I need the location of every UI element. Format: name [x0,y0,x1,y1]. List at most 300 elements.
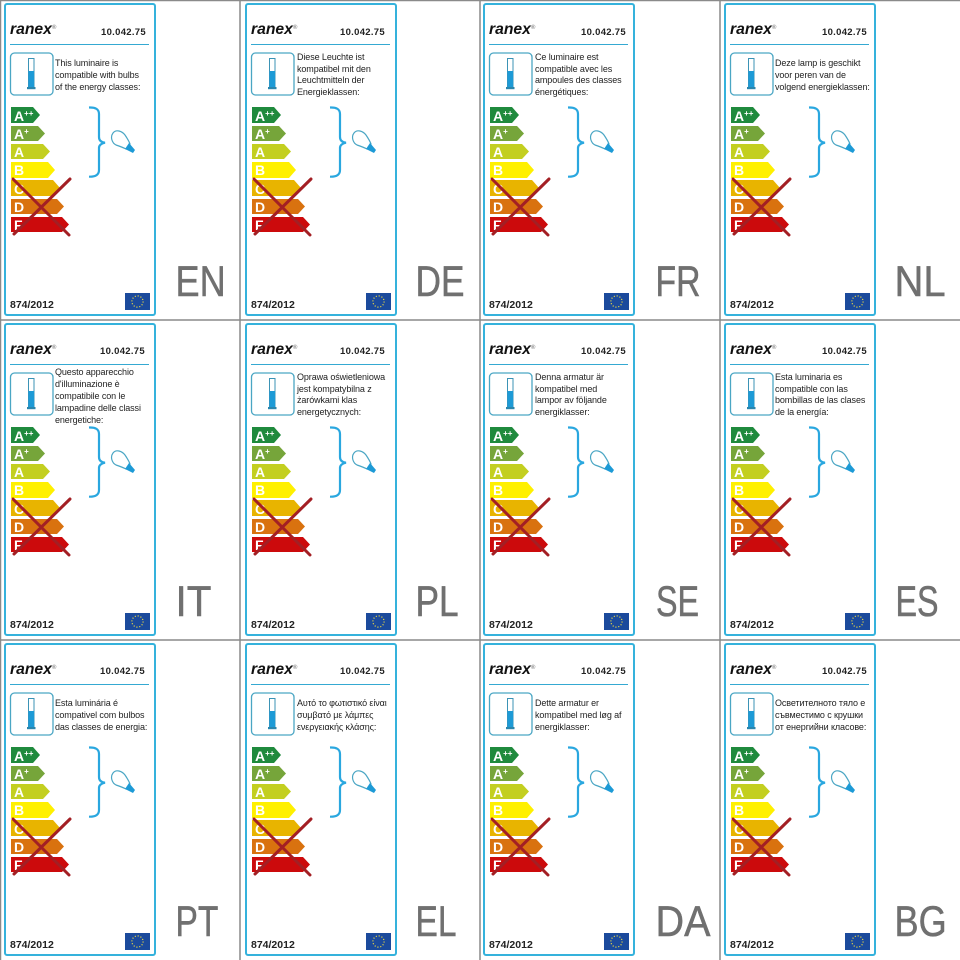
red cross over classes C to F [13,499,70,555]
icon: EU flag [845,933,870,950]
energy class scale: A [493,428,503,444]
language code IT: IT [176,578,211,626]
energy class scale: F [493,857,502,873]
energy class scale: F [255,857,264,873]
energy class scale: C [14,821,24,837]
regulation number: 874/2012 [251,619,295,631]
brand logo: ® [772,344,777,351]
compatibility text: ενεργειακής κλάσης: [297,722,376,732]
energy class scale: B [734,162,744,178]
energy class scale: A [734,748,744,764]
energy class scale: D [493,519,503,535]
energy class scale: F [493,537,502,553]
brand logo: ® [772,664,777,671]
energy class scale: ++ [744,749,754,758]
brand logo: ranex [730,21,772,38]
compatibility text: Ce luminaire est [535,52,599,62]
article number: 10.042.75 [340,27,385,38]
energy class scale: A [493,144,503,160]
compatibility text: от енергийни класове: [775,722,866,732]
energy class scale: B [14,802,24,818]
energy class scale: A [493,108,503,124]
icon: luminaire [10,373,53,415]
article number: 10.042.75 [340,666,385,677]
energy class scale: ++ [744,109,754,118]
icon: bulb [832,771,855,793]
energy class scale: A [255,428,265,444]
compatibility text: съвместимо с крушки [775,710,863,720]
energy class scale: C [734,821,744,837]
brand logo: ranex [10,341,52,358]
icon: bulb [353,131,376,153]
compatibility text: lampadine delle classi [55,403,141,413]
brand logo: ® [531,344,536,351]
energy class scale: + [503,447,508,456]
energy class scale: A [14,748,24,764]
energy class scale [731,107,789,233]
compatibility text: This luminaire is [55,58,119,68]
panel: BG label [725,644,875,955]
brand logo: ranex [489,341,531,358]
energy class scale: C [734,181,744,197]
compatibility text: kompatibel mit den [297,64,371,74]
energy class scale: D [255,519,265,535]
energy class scale: A [734,428,744,444]
compatibility text: compatible avec les [535,64,613,74]
header rule [10,364,149,366]
energy class scale: F [734,217,743,233]
icon: luminaire [252,373,294,415]
article number: 10.042.75 [101,27,146,38]
energy class scale: A [255,126,265,142]
icon: EU flag [845,613,870,630]
energy class scale: D [14,199,24,215]
brand logo: ® [531,24,536,31]
header rule [10,684,149,686]
article number: 10.042.75 [822,27,867,38]
energy class scale: A [734,108,744,124]
brand logo: ® [293,664,298,671]
panel: EN label [5,4,155,315]
energy class scale: A [14,126,24,142]
brand logo: ranex [730,341,772,358]
compatibility text: énergétiques: [535,87,588,97]
brand logo: ® [52,24,57,31]
icon: luminaire [252,53,294,95]
header rule [489,364,628,366]
icon: EU flag [604,293,629,310]
panel: ES label [725,324,875,635]
energy class scale: A [255,144,265,160]
brand logo: ranex [251,341,293,358]
regulation number: 874/2012 [489,939,533,951]
energy class scale: ++ [265,749,275,758]
header rule [730,44,869,46]
compatibility text: Diese Leuchte ist [297,52,365,62]
article number: 10.042.75 [581,346,626,357]
icon: EU flag [604,933,629,950]
compatibility text: d'illuminazione è [55,379,120,389]
article number: 10.042.75 [822,666,867,677]
red cross over classes C to F [254,819,311,875]
energy class scale: F [14,857,23,873]
bracket [568,747,584,817]
red cross over classes C to F [492,499,549,555]
energy class scale: A [493,464,503,480]
language code EN: EN [176,258,226,306]
energy class scale: C [255,181,265,197]
red cross over classes C to F [13,819,70,875]
energy class scale: ++ [265,109,275,118]
panel: DA label [484,644,634,955]
energy class scale: ++ [265,429,275,438]
energy class scale: + [24,127,29,136]
energy class scale: A [493,126,503,142]
icon: bulb [832,451,855,473]
compatibility text: Dette armatur er [535,698,599,708]
regulation number: 874/2012 [489,619,533,631]
brand logo: ® [52,664,57,671]
icon: bulb [832,131,855,153]
compatibility text: compatible con las [775,384,848,394]
energy class scale: A [734,126,744,142]
compatibility text: ampoules des classes [535,75,622,85]
energy class scale: ++ [24,749,34,758]
brand logo: ranex [10,21,52,38]
panel: FR label [484,4,634,315]
red cross over classes C to F [254,499,311,555]
energy class scale: A [255,784,265,800]
brand logo: ® [52,344,57,351]
compatibility text: kompatibel med [535,384,597,394]
compatibility text: Esta luminaria es [775,372,843,382]
energy class scale: B [734,482,744,498]
icon: luminaire [10,693,53,735]
language code DE: DE [416,258,464,306]
energy class scale: ++ [24,429,34,438]
compatibility text: Leuchtmitteln der [297,75,364,85]
brand logo: ® [772,24,777,31]
panel: IT label [5,324,155,635]
header rule [10,44,149,46]
regulation number: 874/2012 [10,939,54,951]
energy class scale [490,107,548,233]
energy class scale: A [14,144,24,160]
brand logo: ranex [10,661,52,678]
bracket [330,747,346,817]
energy class scale: ++ [24,109,34,118]
energy class scale: A [493,784,503,800]
article number: 10.042.75 [581,27,626,38]
energy class scale: A [255,748,265,764]
article number: 10.042.75 [822,346,867,357]
icon: EU flag [125,293,150,310]
energy class scale [490,747,548,873]
energy class scale [731,427,789,553]
red cross over classes C to F [733,819,790,875]
compatibility text: żarówkami klas [297,395,358,405]
energy class scale: A [493,446,503,462]
article number: 10.042.75 [100,666,145,677]
compatibility text: Esta luminária é [55,698,118,708]
language code SE: SE [656,578,699,626]
language code PT: PT [176,898,218,946]
bracket [330,427,346,497]
article number: 10.042.75 [581,666,626,677]
icon: luminaire [490,693,532,735]
energy class scale: B [255,802,265,818]
energy class scale: D [493,839,503,855]
energy class scale: A [734,464,744,480]
energy class scale: F [734,857,743,873]
icon: luminaire [730,53,773,95]
compatibility text: das classes de energia: [55,722,147,732]
icon: bulb [591,451,614,473]
header rule [730,684,869,686]
icon: EU flag [366,933,391,950]
icon: bulb [591,131,614,153]
energy class scale: A [14,108,24,124]
energy class scale: C [493,821,503,837]
language code ES: ES [896,578,939,626]
icon: EU flag [845,293,870,310]
energy class scale [11,747,69,873]
compatibility text: lampor av följande [535,395,607,405]
energy class scale: A [255,464,265,480]
energy class scale: F [734,537,743,553]
energy class scale: A [493,748,503,764]
bracket [330,107,346,177]
energy class scale: D [734,519,744,535]
energy class scale: ++ [503,109,513,118]
brand logo: ® [531,664,536,671]
icon: EU flag [604,613,629,630]
brand logo: ® [293,344,298,351]
energy class scale: A [14,464,24,480]
language code NL: NL [894,258,946,306]
panel: NL label [725,4,875,315]
header rule [489,684,628,686]
energy class scale: ++ [744,429,754,438]
energy class scale: D [14,519,24,535]
brand logo: ranex [730,661,772,678]
energy class scale: D [255,839,265,855]
regulation number: 874/2012 [730,299,774,311]
compatibility text: Αυτό το φωτιστικό είναι [297,698,387,708]
energy class scale [252,427,310,553]
compatibility text: Deze lamp is geschikt [775,58,861,68]
compatibility text: Осветителното тяло е [775,698,865,708]
energy class scale: F [255,217,264,233]
icon: luminaire [730,693,773,735]
panel: DE label [246,4,396,315]
bracket [568,107,584,177]
language code BG: BG [894,898,947,946]
energy class scale: + [24,767,29,776]
compatibility text: de la energía: [775,407,829,417]
energy class scale: + [744,447,749,456]
bracket [89,747,105,817]
icon: luminaire [10,53,53,95]
bracket [809,747,825,817]
energy class scale: A [255,108,265,124]
icon: bulb [112,131,135,153]
energy class scale: A [14,766,24,782]
header rule [251,684,390,686]
red cross over classes C to F [733,499,790,555]
regulation number: 874/2012 [730,619,774,631]
energy class scale: C [255,821,265,837]
regulation number: 874/2012 [251,939,295,951]
article number: 10.042.75 [340,346,385,357]
language code DA: DA [656,898,711,946]
energy class scale: + [265,767,270,776]
compatibility text: volgend energieklassen: [775,82,870,92]
language code FR: FR [656,258,701,306]
energy class scale: + [265,447,270,456]
icon: luminaire [252,693,294,735]
energy class scale: A [734,144,744,160]
regulation number: 874/2012 [251,299,295,311]
bracket [89,427,105,497]
energy class scale [11,107,69,233]
regulation number: 874/2012 [10,299,54,311]
energy class scale [490,427,548,553]
compatibility text: Denna armatur är [535,372,604,382]
header rule [251,44,390,46]
energy class scale [252,747,310,873]
compatibility text: compatible with bulbs [55,70,140,80]
brand logo: ranex [489,21,531,38]
energy class scale: D [734,199,744,215]
energy class scale: C [14,501,24,517]
bracket [809,107,825,177]
panel: SE label [484,324,634,635]
compatibility text: energetycznych: [297,407,361,417]
compatibility text: of the energy classes: [55,82,140,92]
energy class scale: + [265,127,270,136]
energy class scale: F [255,537,264,553]
language code PL: PL [416,578,459,626]
compatibility text: kompatibel med løg af [535,710,622,720]
energy class scale: + [24,447,29,456]
energy class scale: C [493,501,503,517]
icon: luminaire [490,53,532,95]
icon: luminaire [730,373,773,415]
energy class scale: B [14,482,24,498]
compatibility text: Energieklassen: [297,87,360,97]
red cross over classes C to F [492,819,549,875]
panel: PT label [5,644,155,955]
energy class scale: D [255,199,265,215]
energy class scale: F [493,217,502,233]
energy class scale: B [493,802,503,818]
energy class scale: A [255,446,265,462]
compatibility text: Questo apparecchio [55,367,134,377]
icon: EU flag [125,613,150,630]
energy class scale: + [503,767,508,776]
energy class scale: A [493,766,503,782]
icon: EU flag [366,293,391,310]
icon: bulb [353,771,376,793]
energy class scale: F [14,217,23,233]
energy class scale: D [14,839,24,855]
brand logo: ranex [489,661,531,678]
regulation number: 874/2012 [489,299,533,311]
bracket [568,427,584,497]
header rule [730,364,869,366]
energy class scale: B [255,162,265,178]
compatibility text: bombillas de las clases [775,395,866,405]
bracket [89,107,105,177]
energy class scale: B [493,162,503,178]
energy class scale: ++ [503,429,513,438]
energy class scale [731,747,789,873]
brand logo: ranex [251,661,293,678]
icon: luminaire [490,373,532,415]
energy class scale: B [255,482,265,498]
bracket [809,427,825,497]
energy class scale: A [14,428,24,444]
energy class scale: D [493,199,503,215]
compatibility text: energiklasser: [535,722,590,732]
energy class scale: F [14,537,23,553]
energy class scale: A [255,766,265,782]
red cross over classes C to F [492,179,549,235]
article number: 10.042.75 [100,346,145,357]
compatibility text: συμβατό με λάμπες [297,710,374,720]
icon: bulb [591,771,614,793]
energy class scale: A [734,784,744,800]
red cross over classes C to F [13,179,70,235]
header rule [489,44,628,46]
red cross over classes C to F [733,179,790,235]
icon: bulb [353,451,376,473]
energy class scale: A [734,446,744,462]
language code EL: EL [416,898,457,946]
brand logo: ® [293,24,298,31]
compatibility text: compatibile con le [55,391,125,401]
red cross over classes C to F [254,179,311,235]
energy class scale: B [14,162,24,178]
compatibility text: voor peren van de [775,70,846,80]
panel: EL label [246,644,396,955]
icon: bulb [112,771,135,793]
energy class scale: C [493,181,503,197]
compatibility text: Oprawa oświetleniowa [297,372,385,382]
energy class scale: A [14,446,24,462]
energy class scale: + [744,767,749,776]
compatibility text: jest kompatybilna z [296,384,372,394]
regulation number: 874/2012 [10,619,54,631]
energy class scale: B [734,802,744,818]
energy class scale: D [734,839,744,855]
energy class scale: + [503,127,508,136]
energy class scale: + [744,127,749,136]
energy class scale: C [14,181,24,197]
energy class scale [252,107,310,233]
compatibility text: energiklasser: [535,407,590,417]
energy class scale: C [734,501,744,517]
regulation number: 874/2012 [730,939,774,951]
header rule [251,364,390,366]
energy class scale [11,427,69,553]
energy class scale: A [14,784,24,800]
energy class scale: ++ [503,749,513,758]
energy class scale: A [734,766,744,782]
compatibility text: compativel com bulbos [55,710,145,720]
energy class scale: C [255,501,265,517]
